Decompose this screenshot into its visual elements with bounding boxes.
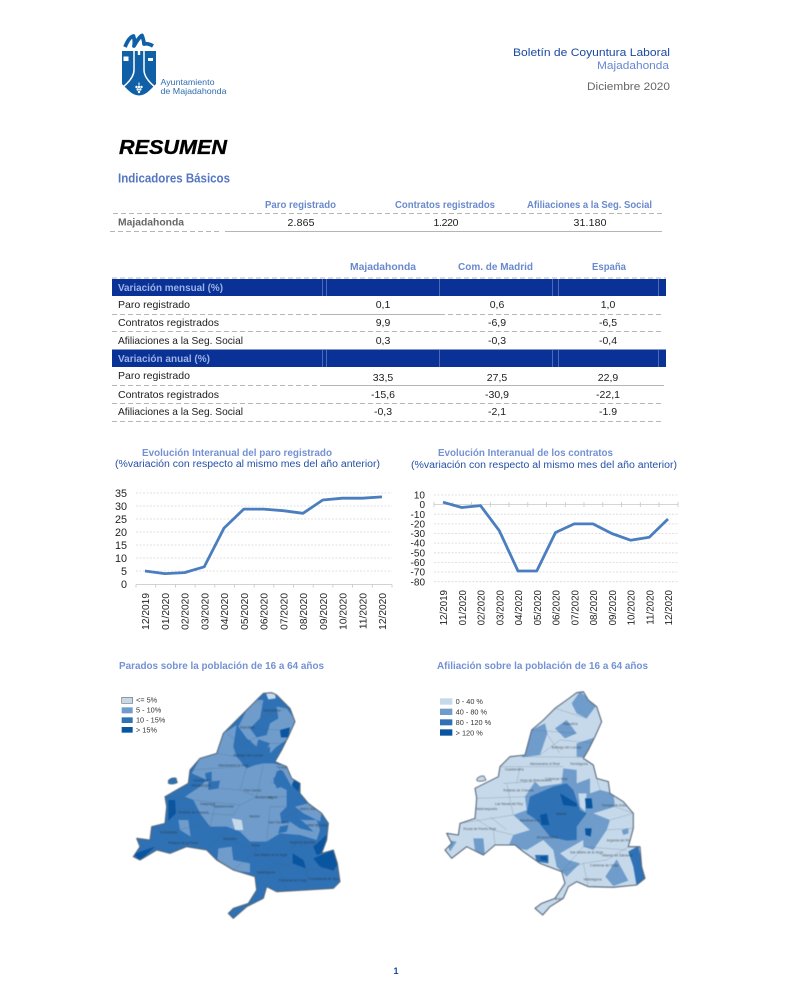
heading: Indicadores Básicos: Indicadores Básicos — [118, 172, 230, 186]
y axis labels: 10 — [414, 490, 425, 502]
rows: variación mensual: 1,0 — [601, 299, 615, 311]
municipality labels: Manzanares el Real — [530, 762, 560, 766]
municipality labels: Colmenar de Oreja — [278, 879, 307, 883]
table: variation: Majadahonda — [350, 261, 416, 273]
table: basic indicators: Paro registrado — [265, 199, 336, 211]
rows: variación mensual: 0,1 — [376, 299, 390, 311]
municipality labels: Manzanares el Real — [218, 764, 248, 768]
municipality labels: Aranjuez — [555, 897, 568, 901]
x axis labels: 01/2020 — [161, 593, 172, 630]
darkest regions — [133, 727, 338, 871]
municipality labels: Cenicientos — [160, 830, 178, 834]
x axis labels: 09/2020 — [608, 589, 619, 625]
title: RESUMEN — [119, 137, 228, 159]
x axis labels: 12/2019 — [141, 593, 152, 630]
municipality labels: Aranjuez — [275, 894, 288, 898]
chart title: paro registrado — [115, 447, 380, 470]
x axis labels: 02/2020 — [476, 589, 488, 625]
municipality labels: Tres Cantos — [243, 789, 262, 793]
y axis labels: -10 — [411, 510, 425, 521]
municipality labels: Pelayos de la Presa — [168, 841, 198, 845]
x axis labels: 07/2020 — [570, 589, 581, 625]
x axis labels: 05/2020 — [240, 593, 251, 630]
rows: variación mensual: -0,3 — [488, 335, 506, 347]
logo: Ayuntamiento de Majadahonda — [122, 36, 227, 96]
municipality labels: Las Navas del Rey — [495, 802, 523, 806]
band: variación mensual: Variación mensual (%) — [118, 282, 223, 294]
municipality labels: Valdemaqueda — [475, 807, 497, 811]
x axis labels: 01/2020 — [458, 589, 469, 625]
municipal boundaries — [170, 702, 324, 872]
municipality labels: Torrelaguna — [277, 765, 294, 769]
icon: shield — [122, 51, 156, 96]
band: variación anual: Variación anual (%) — [118, 353, 210, 365]
municipality labels: Madrid — [249, 815, 260, 819]
municipality labels: Fuentidueña de Tajo — [308, 877, 339, 881]
x axis labels: 08/2020 — [589, 589, 600, 625]
municipality labels: Torrejón de Ardoz — [602, 804, 628, 808]
municipality labels: Buitrago del Lozoya — [552, 745, 581, 749]
municipality labels: Arganda del Rey — [290, 840, 315, 844]
chart title: paro registrado: (%variación con respecto al mismo mes del año anterior) — [115, 459, 380, 470]
dark core — [527, 783, 646, 886]
municipality labels: Robledo de Chavela — [503, 789, 534, 793]
x axis labels — [439, 589, 675, 625]
municipality labels: Valdelaguna — [583, 878, 602, 882]
rows: variación anual: -2,1 — [488, 406, 506, 418]
chart title: contratos: (%variación con respecto al mismo mes del año anterior) — [411, 460, 677, 471]
municipality labels: Guadarrama — [193, 779, 212, 783]
municipality labels: Galapagar — [200, 802, 216, 806]
line chart: paro registrado — [115, 488, 392, 630]
y axis labels — [411, 490, 425, 588]
table: basic indicators — [110, 199, 662, 232]
legend: afiliación: 80 - 120 % — [456, 718, 492, 727]
x axis labels: 07/2020 — [279, 593, 290, 630]
municipality labels: Guadarrama — [505, 768, 524, 772]
y axis labels: 15 — [115, 540, 127, 552]
legend: parados: > 15% — [136, 725, 157, 734]
municipality labels: Nuevo Baztán — [300, 807, 321, 811]
rows: variación mensual: -0,4 — [599, 335, 617, 347]
municipality labels: Buitrago del Lozoya — [233, 754, 263, 758]
municipal boundaries — [447, 708, 633, 887]
y axis labels: -40 — [411, 539, 425, 550]
municipality labels: Somosierra — [263, 709, 280, 713]
municipality labels: Villarejo de Salvanés — [602, 854, 633, 858]
y axis labels: 25 — [115, 514, 127, 526]
x axis labels: 09/2020 — [319, 593, 330, 630]
municipality labels: San Fernando — [268, 820, 290, 824]
rows: variación mensual: 9,9 — [376, 317, 390, 329]
light-medium regions — [178, 700, 322, 873]
y axis labels: -20 — [411, 520, 425, 530]
municipality labels: Rascafría — [240, 725, 254, 729]
municipality labels: Algete — [268, 795, 278, 799]
x axis labels: 12/2019 — [439, 590, 450, 625]
header: bulletin title: Majadahonda — [597, 60, 670, 72]
light wedge — [578, 793, 587, 812]
rows: variación anual: 22,9 — [598, 372, 618, 384]
rows: variación anual — [112, 370, 664, 422]
municipality labels: Robledo de Chavela — [178, 810, 209, 814]
legend: parados: 10 - 15% — [136, 716, 166, 725]
x axis labels: 04/2020 — [220, 593, 231, 630]
y axis labels: 0 — [419, 500, 425, 511]
rows: variación anual: Afiliaciones a la Seg. Social — [118, 406, 243, 418]
y axis labels: 0 — [121, 579, 127, 591]
rows: variación anual: Contratos registrados — [118, 389, 219, 401]
municipality labels: San Martín de la Vega — [570, 850, 603, 854]
heading: parados map: Parados sobre la población de 16 a 64 años — [119, 660, 324, 672]
chart title: contratos — [411, 447, 677, 471]
header: bulletin title: Boletín de Coyuntura Laboral — [513, 47, 670, 59]
legend: parados — [122, 696, 166, 734]
table: basic indicators: Afiliaciones a la Seg. Social — [527, 199, 652, 211]
municipality labels: Torrelaguna — [570, 762, 588, 766]
municipality labels: Majadahonda — [213, 804, 234, 808]
rows: variación mensual: 0,3 — [376, 335, 390, 347]
y axis labels: -30 — [411, 529, 425, 540]
table: basic indicators: 2.865 — [288, 217, 315, 229]
municipality labels: Móstoles — [223, 837, 237, 841]
table: variation — [112, 261, 666, 422]
municipality labels: Madrid — [556, 812, 566, 816]
logo wordmark — [160, 77, 227, 96]
y axis labels: -70 — [411, 568, 425, 579]
rows: variación mensual: Afiliaciones a la Seg. Social — [118, 335, 243, 347]
rows: variación mensual — [112, 299, 664, 347]
rows: variación mensual: Contratos registrados — [118, 317, 219, 329]
darkest regions — [540, 793, 593, 861]
x axis labels: 10/2020 — [626, 589, 638, 625]
municipality labels: Valdelaguna — [257, 870, 275, 874]
legend: afiliación: 0 - 40 % — [456, 697, 483, 706]
municipality labels: Arroyomolinos — [537, 835, 558, 839]
municipality labels — [160, 709, 339, 898]
rows: variación anual: -15,6 — [371, 389, 395, 401]
x axis labels: 03/2020 — [200, 593, 211, 630]
y axis labels — [115, 488, 127, 591]
logo wordmark: Ayuntamiento — [160, 77, 215, 87]
map: afiliación — [440, 687, 650, 920]
band: variación mensual — [112, 279, 666, 296]
y axis labels: 30 — [115, 501, 127, 513]
rows: variación anual: -30,9 — [485, 389, 509, 401]
chart title: paro registrado: Evolución Interanual del paro registrado — [142, 447, 332, 459]
y axis labels: 5 — [121, 566, 127, 578]
municipality labels: Hoyo de Manzanares — [520, 779, 552, 783]
table: basic indicators: 31.180 — [574, 217, 607, 229]
municipality labels: Rozas de Puerto Real — [463, 827, 496, 831]
data line — [145, 497, 382, 574]
line chart: contratos — [411, 490, 678, 625]
y axis labels: 10 — [115, 553, 127, 565]
rows: variación mensual: Paro registrado — [118, 299, 190, 311]
rows: variación anual: 27,5 — [487, 372, 507, 384]
x axis labels: 05/2020 — [533, 589, 544, 625]
table: basic indicators: 1.220 — [434, 217, 459, 229]
legend: parados: <= 5% — [136, 696, 158, 705]
map: parados — [127, 687, 347, 923]
municipality labels: Navalcarnero — [520, 819, 540, 823]
legend: afiliación: 40 - 80 % — [456, 707, 488, 716]
rows: variación anual: Paro registrado — [118, 370, 190, 382]
x axis labels: 06/2020 — [552, 589, 562, 625]
x axis labels: 08/2020 — [299, 593, 310, 630]
rows: variación anual: -0,3 — [374, 406, 392, 418]
page number: 1 — [394, 966, 399, 976]
municipality labels: Colmenar Viejo — [545, 777, 568, 781]
rows: variación anual: 33,5 — [373, 372, 393, 384]
x axis labels: 12/2020 — [378, 593, 389, 630]
x axis labels: 02/2020 — [180, 593, 192, 630]
band: variación anual — [112, 350, 666, 367]
rows: variación mensual: -6,5 — [599, 317, 617, 329]
icon: wave emblem — [125, 36, 153, 47]
municipality labels: Navacerrada — [192, 784, 211, 788]
municipality labels: San Martín de la Vega — [254, 853, 287, 857]
municipality labels: Arganda del Rey — [607, 839, 632, 843]
legend: afiliación: > 120 % — [456, 728, 483, 737]
data line — [443, 502, 668, 571]
table: variation: Com. de Madrid — [458, 261, 533, 273]
y axis labels: -50 — [411, 548, 425, 559]
municipality labels: Parla — [252, 844, 260, 848]
logo wordmark: de Majadahonda — [160, 86, 227, 96]
municipality labels: Rascafría — [563, 722, 578, 726]
municipality labels: Villar del Olmo — [307, 824, 328, 828]
municipality labels: Colmenar de Oreja — [590, 864, 618, 868]
heading: afiliación map: Afiliación sobre la población de 16 a 64 años — [437, 660, 648, 672]
x axis labels: 11/2020 — [645, 589, 656, 625]
rows: variación mensual: 0,6 — [490, 299, 504, 311]
x axis labels: 10/2020 — [338, 593, 350, 630]
y axis labels: 20 — [115, 527, 127, 539]
y axis labels: -80 — [411, 577, 425, 588]
header: bulletin title — [513, 47, 670, 93]
legend: afiliación — [440, 697, 492, 737]
x axis labels: 12/2020 — [664, 589, 675, 625]
header: bulletin title: Diciembre 2020 — [587, 81, 670, 93]
chart title: contratos: Evolución Interanual de los contratos — [438, 447, 613, 459]
legend: parados: 5 - 10% — [136, 706, 162, 715]
rows: variación anual: -22,1 — [596, 389, 620, 401]
municipality labels — [463, 722, 633, 901]
x axis labels: 06/2020 — [260, 593, 270, 630]
x axis labels: 03/2020 — [495, 589, 506, 625]
municipality labels: Alcobendas — [255, 795, 273, 799]
medium regions — [446, 692, 628, 886]
table: basic indicators: Majadahonda — [118, 218, 184, 228]
rows: variación anual: -1.9 — [599, 406, 617, 418]
rows: variación mensual: -6,9 — [488, 317, 506, 329]
x axis labels: 11/2020 — [358, 593, 369, 629]
y axis labels: -60 — [411, 558, 425, 569]
lightest regions — [232, 692, 276, 830]
x axis labels: 04/2020 — [514, 589, 525, 625]
y axis labels: 35 — [115, 488, 127, 500]
table: basic indicators: Contratos registrados — [395, 199, 495, 211]
table: variation: España — [592, 261, 626, 273]
x axis labels — [141, 593, 389, 630]
